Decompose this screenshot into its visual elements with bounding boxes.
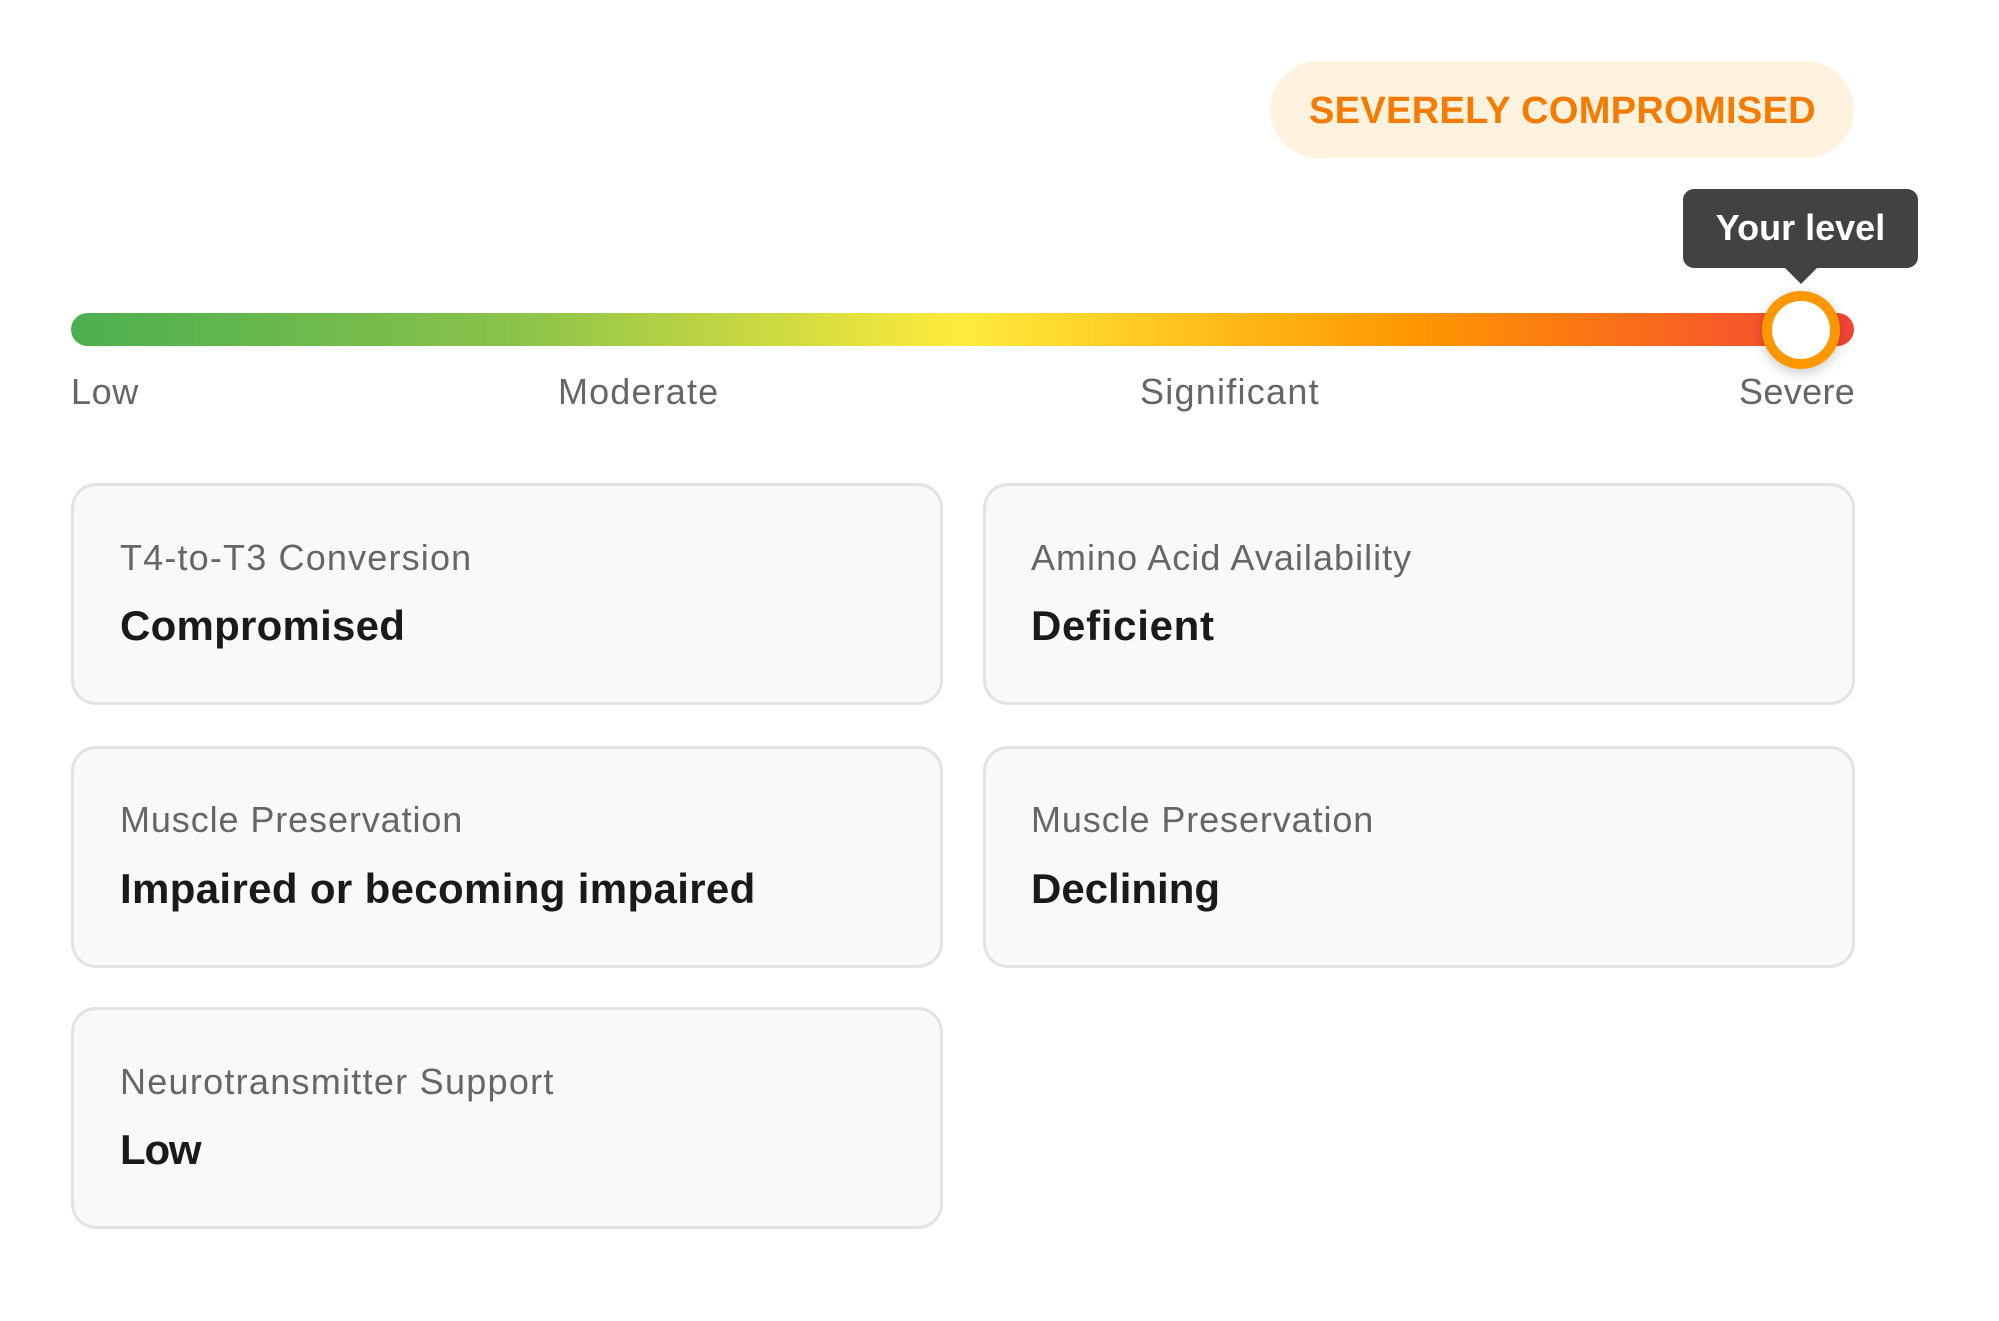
scale label: low: Low xyxy=(71,371,139,412)
card: neurotransmitter support xyxy=(71,1007,943,1229)
scale label: significant: Significant xyxy=(1140,371,1320,412)
card value: Compromised xyxy=(120,602,405,649)
scale labels xyxy=(71,371,1855,412)
scale label: moderate: Moderate xyxy=(558,371,719,412)
level marker knob xyxy=(1762,291,1840,369)
card label: Neurotransmitter Support xyxy=(120,1061,555,1102)
card value: Impaired or becoming impaired xyxy=(120,865,756,912)
card value: Deficient xyxy=(1031,602,1215,649)
tooltip box xyxy=(1683,189,1918,268)
tooltip pointer xyxy=(1785,268,1817,284)
badge text: SEVERELY COMPROMISED xyxy=(1309,90,1816,132)
severity gradient bar xyxy=(71,313,1854,346)
card: amino acid availability xyxy=(983,483,1855,705)
card: muscle preservation declining xyxy=(983,746,1855,968)
card label: Muscle Preservation xyxy=(120,799,463,840)
card label: T4-to-T3 Conversion xyxy=(120,537,472,578)
status badge: severely compromised xyxy=(1270,61,1854,158)
card: muscle preservation impaired xyxy=(71,746,943,968)
card value: Declining xyxy=(1031,865,1220,912)
card label: Muscle Preservation xyxy=(1031,799,1374,840)
card: T4-to-T3 conversion xyxy=(71,483,943,705)
scale label: severe: Severe xyxy=(1739,371,1855,412)
card label: Amino Acid Availability xyxy=(1031,537,1412,578)
tooltip: your level xyxy=(1683,189,1918,284)
tooltip text: Your level xyxy=(1716,207,1885,248)
card value: Low xyxy=(120,1126,200,1173)
